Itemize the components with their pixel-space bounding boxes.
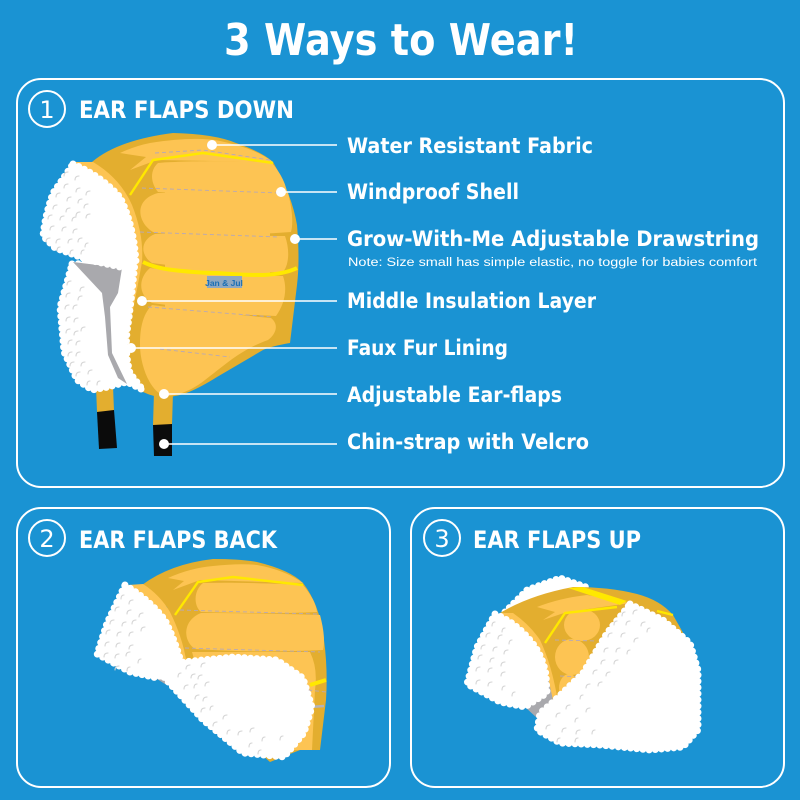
illustration: hat with ear flaps up xyxy=(467,578,698,750)
fur flap top xyxy=(43,164,136,267)
fur tufts: left flap xyxy=(104,595,145,671)
heading: ear flaps up: EAR FLAPS UP xyxy=(473,526,641,554)
drawstring top xyxy=(130,153,273,195)
fur tufts xyxy=(46,172,100,385)
grey elastic xyxy=(310,706,324,707)
illustration: hat with ear flaps back xyxy=(97,559,327,762)
stitches xyxy=(555,640,597,677)
heading: ear flaps back: EAR FLAPS BACK xyxy=(79,526,278,554)
callout: water resistant fabric xyxy=(207,134,593,158)
callout: middle insulation layer: Middle Insulation Layer xyxy=(347,289,597,313)
number badge 3 xyxy=(424,520,460,556)
top highlight xyxy=(537,595,630,620)
callout: chin-strap with velcro: Chin-strap with Velcro xyxy=(347,430,589,454)
drawstring middle xyxy=(143,262,297,275)
callout: windproof shell: Windproof Shell xyxy=(347,180,519,204)
grey lining xyxy=(157,657,186,684)
quilting stitches xyxy=(140,150,281,357)
hat shell xyxy=(142,559,327,762)
illustration: hat with ear flaps down xyxy=(43,133,298,456)
panel: ear flaps down xyxy=(17,79,784,487)
brand label: Jan & Jul xyxy=(205,278,243,288)
trim band xyxy=(500,613,558,702)
callout: faux fur lining: Faux Fur Lining xyxy=(347,336,508,360)
fur flap left xyxy=(467,614,547,707)
callout: middle insulation layer xyxy=(137,289,597,313)
hat shell xyxy=(92,133,298,397)
fur flap right xyxy=(161,657,312,757)
insulated puffs xyxy=(120,139,292,396)
back fur xyxy=(505,578,586,620)
yellow band xyxy=(568,587,627,605)
right chin strap xyxy=(153,392,173,456)
fur tufts xyxy=(476,610,650,742)
heading: ear flaps down: EAR FLAPS DOWN xyxy=(79,96,294,124)
puffs xyxy=(168,564,324,750)
callout: adjustable ear-flaps: Adjustable Ear-flaps xyxy=(347,383,562,407)
grey lining xyxy=(525,673,553,718)
callout: windproof shell xyxy=(276,180,519,204)
callout: water resistant fabric: Water Resistant Fabric xyxy=(347,134,593,158)
panel: ear flaps up xyxy=(411,508,784,787)
callout: chin-strap with velcro xyxy=(159,430,589,454)
hat shell xyxy=(500,587,690,702)
stitches xyxy=(180,610,326,692)
number badge 1: 1 xyxy=(39,96,55,124)
fur tufts: right flap xyxy=(178,663,283,754)
trim band xyxy=(128,584,187,665)
fur flap left xyxy=(97,585,181,678)
panel: ear flaps back xyxy=(17,508,390,787)
fur flap bottom xyxy=(60,262,143,390)
callout: adjustable ear-flaps xyxy=(159,383,562,407)
note: size small: Note: Size small has simple elastic, no toggle for babies comfort xyxy=(348,257,758,269)
callout: drawstring: Grow-With-Me Adjustable Drawstring xyxy=(347,227,759,251)
drawstring end xyxy=(310,680,326,685)
drawstring top xyxy=(175,577,303,615)
callout: faux fur lining xyxy=(126,336,508,360)
grey lining xyxy=(73,262,127,384)
puffs xyxy=(555,609,600,702)
number badge 1 xyxy=(29,91,65,127)
inner trim band xyxy=(75,162,142,375)
drawstring xyxy=(545,607,673,643)
fur flap right xyxy=(537,604,698,750)
number badge 2 xyxy=(29,520,65,556)
number badge 3: 3 xyxy=(434,525,450,553)
number badge 2: 2 xyxy=(39,525,55,553)
left chin strap xyxy=(96,386,117,449)
title: 3 Ways to Wear! xyxy=(224,15,578,66)
